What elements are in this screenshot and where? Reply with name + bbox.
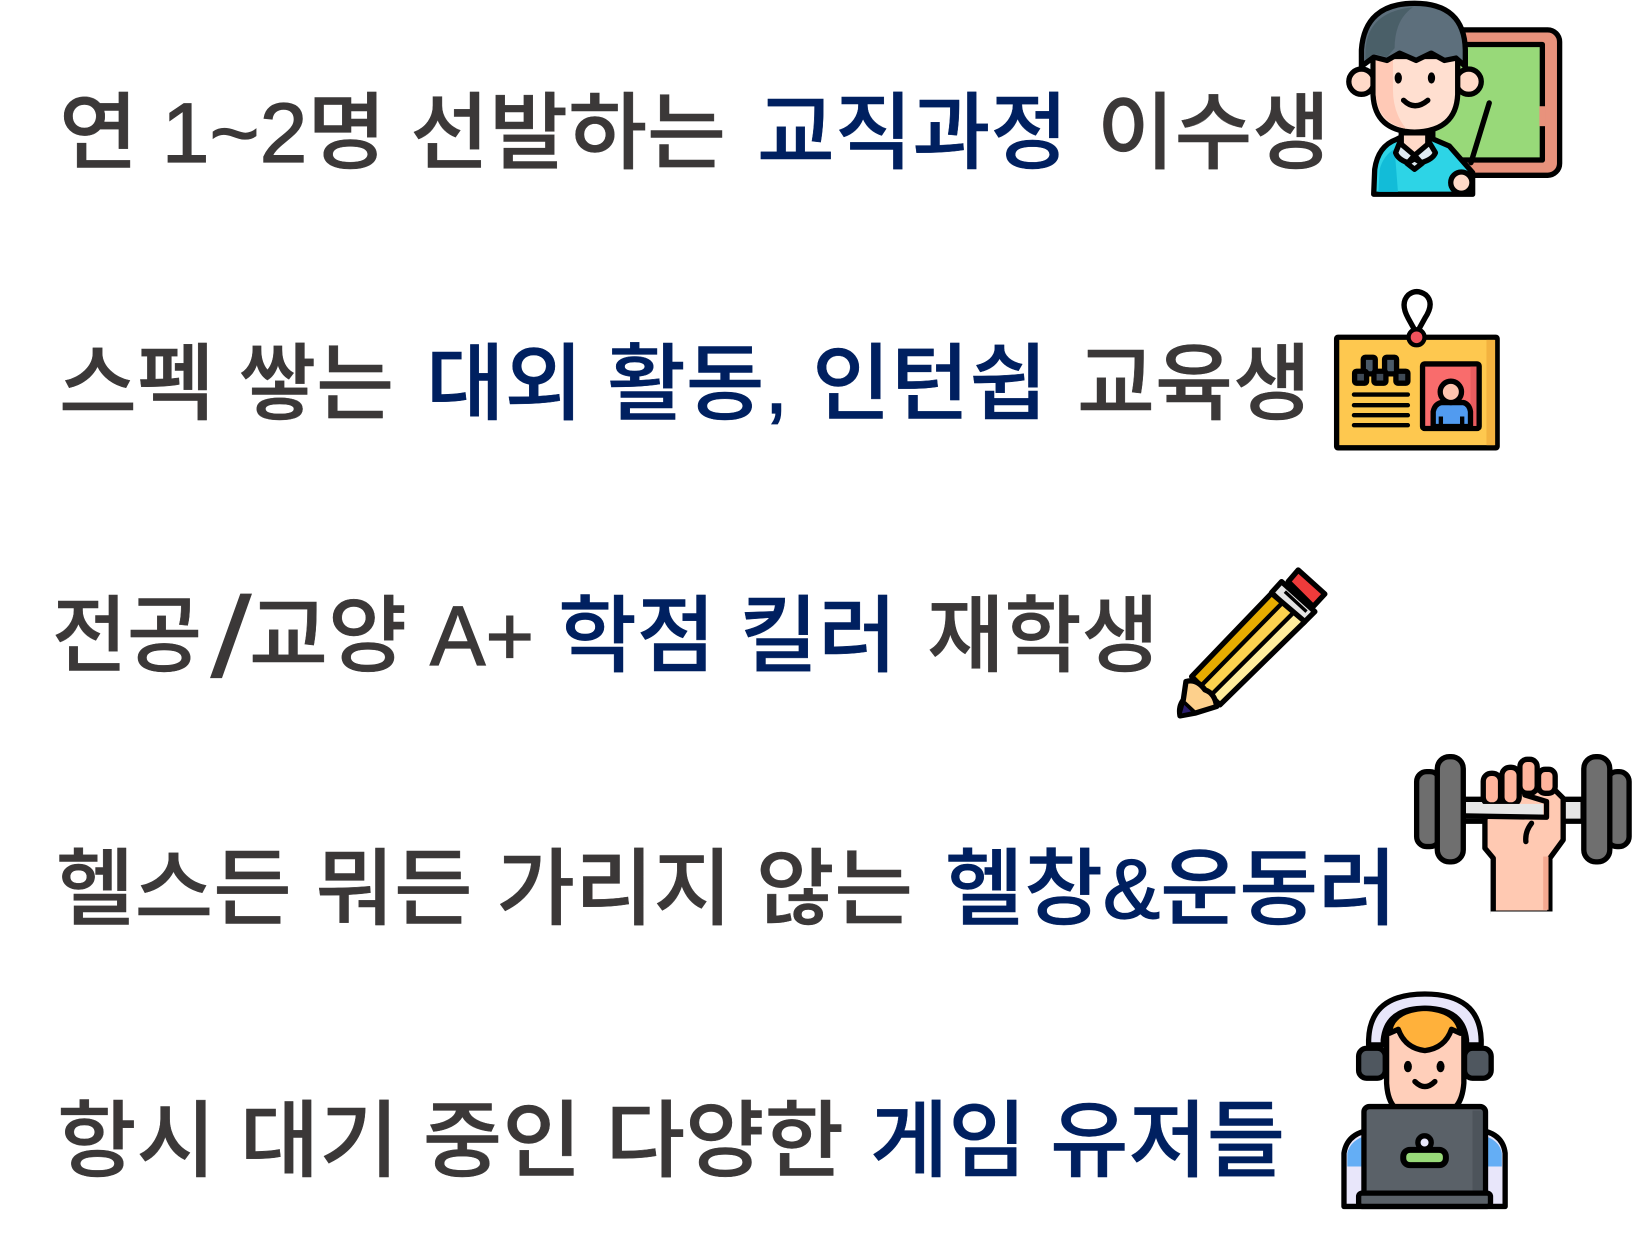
text: row 3 grey lead: 교양 — [249, 589, 407, 683]
icon: fist holding dumbbell — [1417, 757, 1629, 916]
text: row 4 grey lead: 헬스든 뭐든 가리지 않는 — [56, 842, 913, 936]
text: row 2 grey lead: 스펙 쌓는 — [59, 337, 394, 431]
text: row 3 highlight: 학점 킬러 — [558, 589, 897, 683]
text: row 3 grey lead: 전공 — [52, 589, 202, 683]
row 1: teaching course students — [59, 86, 1330, 180]
text: row 5 highlight: 게임 유저들 — [870, 1094, 1285, 1188]
icon: teacher at green board — [1349, 3, 1560, 194]
row 4: fitness — [56, 842, 1397, 936]
row 5: gamers — [57, 1094, 1285, 1188]
icon: id badge — [1337, 292, 1497, 448]
text: row 5 grey lead: 항시 대기 중인 다양한 — [57, 1094, 844, 1188]
text: row 3 grey lead: A+ — [430, 589, 534, 683]
text: row 1 highlight: 교직과정 — [757, 86, 1068, 180]
text: row 2 highlight: 대외 활동, 인턴쉽 — [426, 337, 1048, 431]
text: row 3 grey lead — [52, 574, 534, 702]
text: row 3 grey lead: / — [210, 574, 252, 702]
text: row 4 highlight: 헬창&운동러 — [945, 842, 1397, 936]
text: row 1 tail: 이수생 — [1097, 86, 1330, 180]
text: row 3 tail: 재학생 — [927, 589, 1159, 683]
icon: gamer with headset and laptop — [1344, 994, 1505, 1206]
row 3: GPA killers — [52, 574, 1159, 702]
icon: pencil — [1179, 570, 1325, 716]
row 2: external activities — [59, 337, 1311, 431]
text: row 2 tail: 교육생 — [1077, 337, 1311, 431]
text: row 1 grey lead: 연 1~2명 선발하는 — [59, 86, 726, 180]
